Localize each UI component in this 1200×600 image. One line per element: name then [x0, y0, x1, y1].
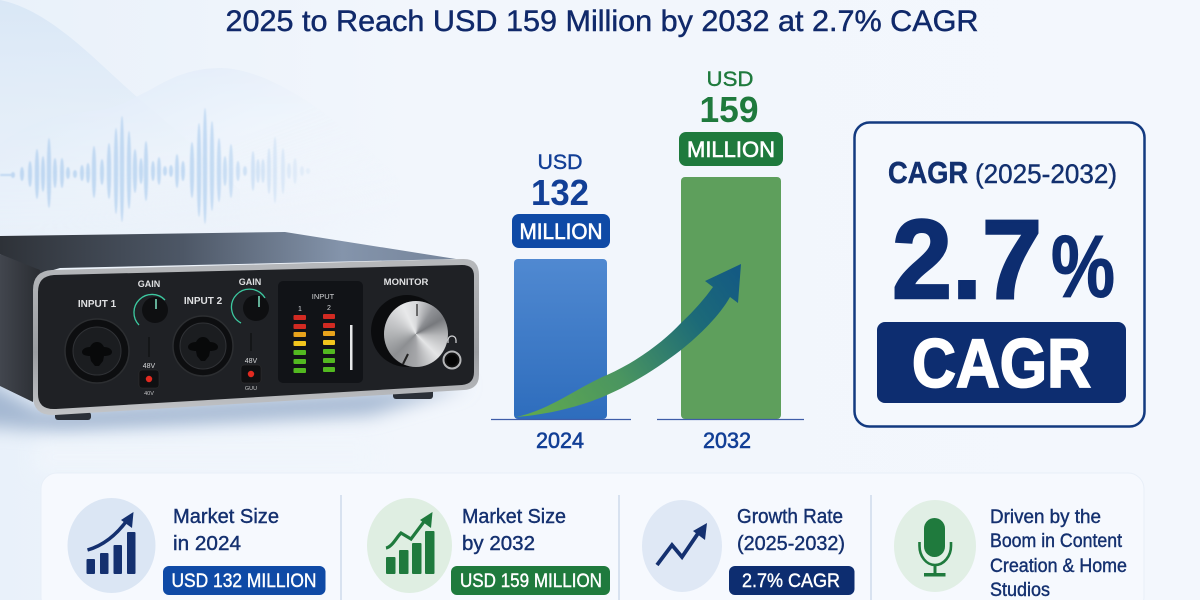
stat: market size 2032	[367, 498, 610, 595]
stat: growth rate: (2025-2032)	[737, 533, 845, 555]
48V switch 1: 40V	[144, 391, 154, 397]
stat: market size 2032: by 2032	[462, 533, 535, 555]
gain knob 1	[134, 279, 168, 357]
stat: growth rate	[642, 500, 854, 595]
48V switch 2	[241, 358, 261, 392]
audio interface device	[0, 232, 479, 420]
level meter	[278, 281, 363, 383]
48V switch 1	[139, 363, 159, 397]
bar 2032: USD	[706, 68, 754, 91]
bar 2032	[657, 68, 804, 453]
stat: growth rate: 2.7% CAGR	[742, 571, 840, 592]
stat: growth rate: Growth Rate	[737, 506, 843, 528]
stat: driver: Driven by the	[990, 507, 1101, 528]
bottom summary card	[41, 473, 1144, 600]
bar 2024: 2024	[536, 428, 584, 453]
bar 2032: MILLION	[687, 137, 775, 162]
input 1: INPUT 1	[78, 299, 117, 310]
device top and side	[0, 232, 456, 402]
icon: microphone	[894, 500, 976, 592]
level meter: 2	[327, 305, 331, 312]
CAGR panel	[854, 122, 1144, 426]
gain knob 2	[231, 277, 269, 351]
CAGR badge label: CAGR	[912, 325, 1091, 402]
background hills	[0, 0, 136, 110]
bar 2024: MILLION	[520, 219, 602, 244]
headphone jack	[444, 336, 460, 368]
stat: market size 2032: USD 159 MILLION	[460, 571, 602, 592]
CAGR period: (2025-2032)	[975, 159, 1117, 189]
48V switch 1: 48V	[143, 363, 156, 370]
growth arrow	[516, 264, 741, 417]
stat: market size 2024: USD 132 MILLION	[172, 571, 316, 592]
device front panel	[38, 265, 474, 409]
input 2	[173, 296, 233, 376]
stat: market size 2024: in 2024	[173, 533, 241, 555]
stat: driver: Boom in Content	[990, 531, 1123, 552]
input 2: INPUT 2	[184, 296, 223, 307]
icon: rising bars blue	[68, 498, 156, 593]
icon: trend arrow	[642, 500, 722, 592]
gain knob 1: GAIN	[138, 279, 160, 289]
input 1	[65, 299, 129, 383]
floor reflection	[35, 440, 375, 474]
stat: market size 2032: Market Size	[462, 506, 566, 528]
device shadow on floor	[0, 370, 470, 432]
device feet	[55, 388, 433, 420]
bar 2024: 132	[531, 172, 589, 213]
monitor knob	[371, 277, 448, 367]
CAGR heading: CAGR	[888, 155, 968, 190]
48V switch 2: 48V	[245, 358, 258, 365]
title: 2025 to Reach USD 159 Million by 2032 at 2.7% CAGR	[226, 5, 978, 38]
level meter: 1	[298, 306, 302, 313]
bar 2032: 159	[700, 89, 758, 130]
stat: market size 2024: Market Size	[173, 506, 279, 528]
bar chart	[491, 68, 804, 453]
stat: driver	[894, 500, 1127, 600]
CAGR value: 2.7	[892, 197, 1042, 322]
level meter: INPUT	[312, 292, 335, 301]
48V switch 2: GUU	[245, 386, 257, 392]
monitor knob: MONITOR	[384, 277, 428, 288]
bar 2024	[491, 151, 631, 453]
sound waveform	[0, 108, 310, 224]
bar 2032: 2032	[703, 428, 751, 453]
bar 2024: USD	[538, 151, 582, 174]
CAGR badge	[877, 322, 1126, 403]
percent sign: %	[1051, 217, 1115, 316]
gain knob 2: GAIN	[239, 277, 261, 287]
icon: rising bars green	[367, 498, 452, 593]
device front rim	[33, 259, 479, 415]
stat: driver: Creation & Home	[990, 556, 1127, 577]
stat: market size 2024	[68, 498, 326, 595]
